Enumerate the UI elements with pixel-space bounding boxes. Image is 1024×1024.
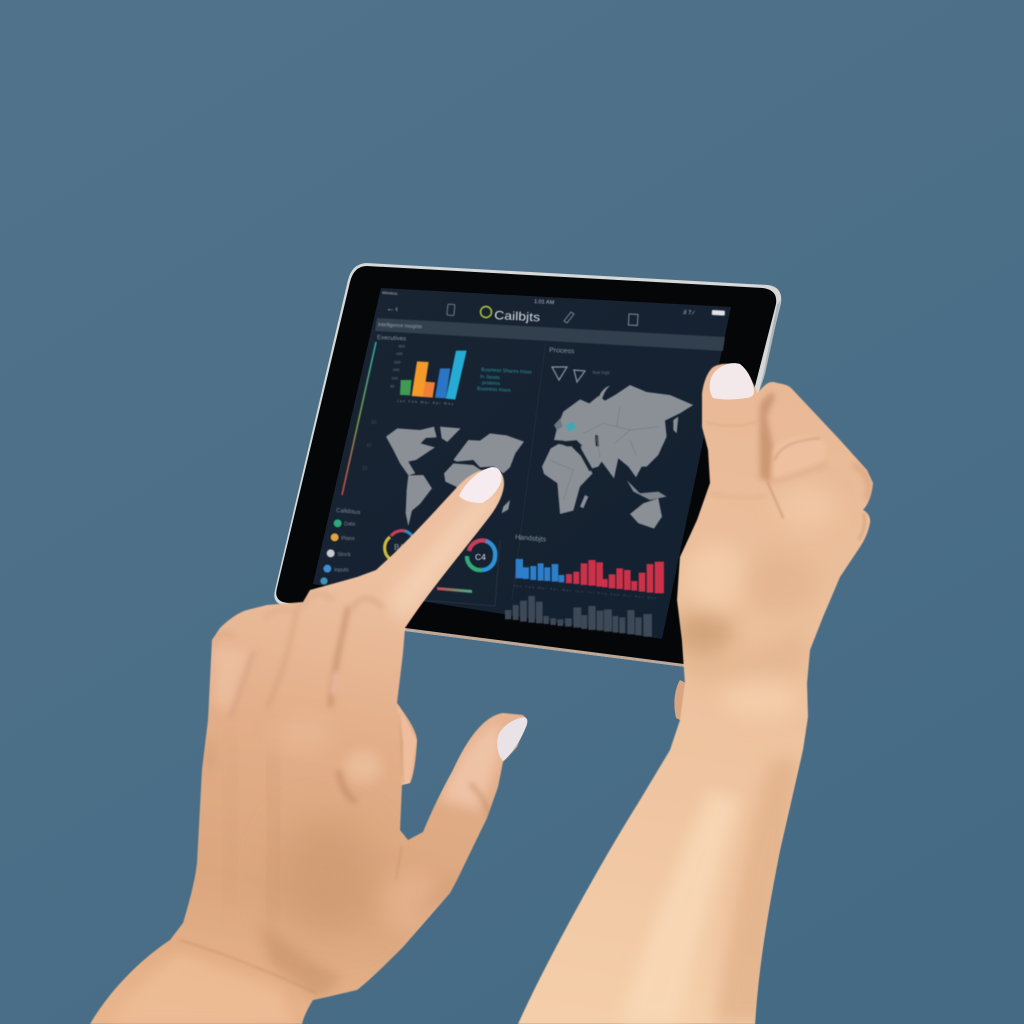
japan: [673, 417, 678, 433]
right hand shading: [620, 392, 869, 1024]
thumb soft crease: [705, 422, 757, 426]
y axis labels: 40: [366, 443, 372, 449]
header band text: Intelligence Insights: [378, 322, 423, 330]
back of hand mid shade: [750, 564, 804, 602]
donut legend heading: Calldisus: [336, 508, 361, 516]
thumb highlight: [440, 720, 500, 810]
thumb nail: [497, 717, 527, 761]
bottom tan edge: [405, 628, 686, 667]
thumb crease: [470, 783, 490, 817]
left hand shading: [110, 485, 500, 1024]
wrist band shadow: [684, 645, 799, 674]
donut blue arc: [405, 531, 415, 543]
eurasia: [453, 433, 524, 473]
progress bar: [437, 587, 472, 593]
country borders: [550, 407, 658, 500]
app title: Cailbjts: [494, 308, 541, 324]
small orange bar: [423, 382, 435, 398]
panel divider right: [512, 340, 546, 600]
vertical gradient scale: [342, 342, 376, 495]
donut value: C4: [475, 552, 486, 562]
red sea: [578, 447, 593, 471]
lower finger crease: [770, 465, 827, 482]
index knuckle: [353, 598, 383, 610]
pink gap glow: [331, 670, 338, 695]
thumb base edge: [420, 880, 457, 910]
donut value: BA: [394, 543, 405, 552]
australia: [630, 498, 662, 529]
legend labels: Stock: [337, 552, 351, 558]
pale knuckle: [345, 750, 382, 783]
tablet black bezel: [276, 266, 776, 664]
middle knuckle: [306, 594, 328, 600]
uk highlighted: [554, 418, 563, 430]
tablet silver rim: [274, 263, 781, 667]
index finger highlight: [385, 485, 495, 625]
chart legend text: Business Shares Insos: [481, 367, 532, 376]
triangle icons: [552, 367, 611, 382]
cyan bar: [446, 351, 467, 400]
wrist crease: [180, 940, 317, 993]
chart legend text: In Jassts: [480, 374, 500, 381]
donut red arc: [391, 531, 405, 536]
legend labels: Inputs: [334, 567, 349, 573]
screen: [313, 288, 731, 639]
y axis labels: 60: [371, 420, 377, 426]
africa: [542, 444, 593, 514]
world map: right: [542, 385, 693, 529]
arm and hand base: [518, 364, 873, 1024]
lower hand light: [386, 881, 444, 942]
x labels: Jan Feb Mar Apr May: [397, 399, 454, 406]
donut blue arc: [482, 541, 495, 570]
tendon shade two: [270, 757, 276, 920]
greenland: [440, 427, 461, 442]
wrist highlight: [110, 953, 293, 1024]
curled finger light: [772, 442, 822, 474]
small caption: Text logs: [592, 370, 611, 375]
thumb base crease: [710, 493, 767, 498]
left panel heading: Executives: [377, 335, 406, 343]
knuckle mark left: [203, 740, 217, 773]
legend labels: Plans: [341, 536, 355, 542]
forearm right edge shade: [715, 760, 800, 1024]
arm highlight: [732, 684, 787, 713]
wrist brown shadow: [673, 610, 733, 657]
thumb nail: [710, 363, 754, 400]
side button: [760, 300, 781, 390]
bar chart: grey: [505, 596, 652, 637]
donut green arc: [467, 556, 482, 570]
eurasia: [554, 385, 693, 478]
legend dot blue: [323, 565, 331, 573]
ring middle gap: [285, 606, 299, 660]
header band: [375, 318, 725, 351]
thumb side gap: [759, 392, 775, 482]
wrist lump behind hand: [674, 680, 690, 722]
axis labels: Jan Feb Mar Apr May Jun Jul Aug Sep Oct Nov Dec: [513, 584, 657, 600]
madagascar: [580, 495, 588, 508]
knuckle shade: [853, 463, 869, 500]
tendon shade one: [227, 743, 234, 910]
blue bars: [516, 559, 564, 582]
thumb web crease: [767, 482, 783, 518]
legend labels: [334, 522, 355, 573]
central back of hand shadow: [287, 827, 368, 928]
screen content: [320, 290, 725, 637]
pinky knuckle: [213, 633, 233, 645]
status clock: 1:01 AM: [534, 299, 555, 306]
right hand and arm: [518, 363, 873, 1024]
donut legend: [320, 519, 355, 585]
side flap dark edge: [400, 713, 403, 783]
y axis labels: [362, 420, 377, 472]
indonesia islands: [627, 480, 667, 500]
battery: [712, 310, 725, 316]
y axis labels: 20: [362, 466, 368, 472]
blue bar: [435, 368, 450, 398]
legend labels: Data: [344, 522, 355, 528]
caspian: [595, 435, 599, 447]
lower right heading: Handsbjts: [515, 534, 547, 544]
hand base: [90, 469, 527, 1024]
axis labels: 300: [394, 359, 401, 364]
app toolbar: [386, 303, 638, 325]
orange bar: [412, 361, 429, 397]
legend dot teal: [320, 577, 328, 585]
africa: [444, 463, 483, 492]
chart legend text: Business Insos: [477, 386, 511, 394]
wrist shade: [260, 923, 343, 1000]
axis labels: 200: [393, 367, 400, 372]
left hand: [90, 467, 527, 1024]
device icon: [447, 304, 455, 316]
madagascar: [502, 500, 510, 513]
donut chart left: [385, 531, 415, 559]
axis labels: 50: [390, 384, 395, 389]
status left: Wireless: [382, 290, 398, 296]
red bars: [566, 560, 664, 593]
pinky ring gap: [230, 652, 253, 717]
lower left card outline: [420, 540, 500, 606]
ring knuckle: [265, 609, 293, 620]
world map: left: [386, 427, 524, 526]
forearm centre highlight: [620, 790, 740, 1024]
arctic island: [598, 386, 610, 402]
middle index gap: [330, 607, 348, 707]
donut red arc: [469, 540, 486, 551]
teal highlight: [565, 422, 577, 432]
back icon: ←‹: [386, 303, 398, 314]
donut yellow arc: [385, 537, 390, 559]
index finger nail: [459, 467, 502, 503]
mediterranean: [555, 440, 583, 447]
chart legend text: [477, 367, 532, 394]
tablet: [274, 263, 781, 667]
bar chart: sales: [390, 343, 467, 406]
bar chart: blue and red: [513, 559, 664, 600]
south america: [406, 475, 432, 526]
knuckle light: [293, 728, 314, 738]
axis labels: [390, 343, 406, 389]
axis labels: 100: [391, 375, 399, 380]
status icons: .il 7 ⁄: [682, 310, 695, 317]
chart legend text: · proteins: [479, 380, 501, 387]
status bar: [382, 290, 725, 317]
triangle icon two: [574, 370, 585, 382]
north america: [386, 427, 437, 475]
palm highlight: [683, 543, 750, 610]
legend dot white: [327, 549, 335, 557]
logo ring: [480, 306, 492, 318]
knuckle dark: [338, 770, 357, 802]
axis labels: 500: [398, 343, 406, 348]
pinky light side: [210, 650, 246, 708]
triangle icon one: [552, 367, 567, 380]
finger fold crease: [775, 438, 820, 460]
right panel heading: Process: [549, 347, 575, 355]
legend dot green: [334, 519, 342, 527]
legend dot orange: [331, 533, 339, 541]
back of hand light: [788, 492, 825, 521]
thumb web crease: [396, 847, 402, 880]
lower knuckle edge: [858, 513, 865, 540]
green bar: [400, 380, 412, 395]
side flap shade: [397, 703, 417, 785]
pencil icon: [564, 312, 574, 323]
axis labels: 400: [396, 351, 403, 356]
donut chart right: [467, 540, 495, 570]
page icon: [628, 314, 638, 325]
